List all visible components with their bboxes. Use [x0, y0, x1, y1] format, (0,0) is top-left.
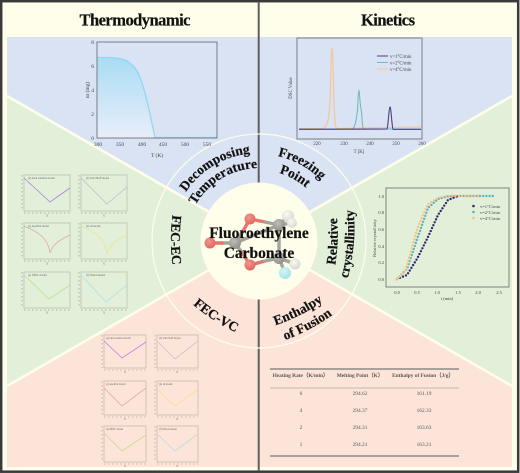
center circle	[200, 182, 318, 300]
plot: Apelblat model VC: (c) Apelblat model	[106, 383, 126, 386]
plot: lambda-h model VC: (d) λh model	[159, 383, 173, 386]
title: Fluoroethylene Carbonate	[209, 225, 309, 262]
plot: lambda-h model: X	[103, 262, 105, 266]
chart: decomposing temperature mass curve: 400	[138, 142, 146, 148]
heading: Kinetics: Kinetics	[361, 10, 416, 30]
plot: NRTL model VC: X	[124, 465, 126, 468]
label: Relative crystallinity: crystallinity	[342, 210, 358, 278]
table: enthalpy of fusion data: 6	[300, 391, 303, 397]
label: Enthalpy of Fusion: of Fusion	[284, 310, 332, 340]
plot: ideal solution model: X	[46, 214, 48, 218]
chart: relative crystallinity curves: 2.0	[475, 290, 482, 295]
label: Freezing Point: Freezing	[278, 147, 326, 182]
chart: relative crystallinity curves: 0.8	[378, 210, 385, 215]
plot: Apelblat model VC	[102, 381, 146, 421]
plot: NRTL model VC: (e) NRTL model	[106, 428, 123, 431]
table: enthalpy of fusion data: 1	[300, 442, 303, 448]
plot: NRTL model: X	[46, 312, 48, 314]
plot: ideal solution model VC	[102, 335, 146, 374]
table: enthalpy of fusion data: 163.21	[417, 442, 432, 448]
chart: relative crystallinity curves: 0.6	[378, 227, 385, 232]
plot: Wilson model VC	[155, 426, 198, 468]
plot: Apelblat model: X	[46, 262, 48, 266]
chart: relative crystallinity curves: 0.2	[378, 260, 384, 265]
plot: Wilson model VC: X	[176, 465, 178, 468]
chart: relative crystallinity curves: t (min)	[441, 296, 454, 301]
table: enthalpy of fusion data: 161.19	[417, 391, 432, 397]
table: enthalpy of fusion data: 294.21	[353, 442, 368, 448]
table: enthalpy of fusion data: Enthalpy of Fusion（J/g）	[392, 371, 454, 379]
label: FEC-VC: FEC-VC	[193, 298, 239, 332]
label: Decomposing Temperature: Temperature	[188, 162, 257, 204]
chart: DSC freezing point peaks: 240	[366, 142, 374, 147]
chart: relative crystallinity curves: 0.4	[378, 244, 385, 249]
label: Relative crystallinity	[326, 210, 358, 278]
plot: Wilson model: (f) Wilson model	[86, 274, 105, 277]
chart: relative crystallinity curves	[372, 188, 509, 301]
chart: relative crystallinity curves: 1.0	[434, 290, 441, 295]
chart: relative crystallinity curves: Relative crystallinity	[372, 218, 377, 257]
panel: green right sector	[259, 96, 512, 386]
heading: Thermodynamic: Thermodynamic	[80, 10, 190, 30]
chart: relative crystallinity curves: 1.0	[378, 194, 385, 199]
chart: relative crystallinity curves: v=2°C/min	[480, 210, 501, 215]
chart: decomposing temperature mass curve: 500	[181, 142, 189, 148]
chart: decomposing temperature mass curve	[84, 40, 217, 159]
chart: decomposing temperature mass curve: 350	[116, 142, 124, 148]
chart: decomposing temperature mass curve: 6	[91, 64, 94, 70]
label: Enthalpy of Fusion	[272, 296, 332, 340]
table: enthalpy of fusion data	[270, 369, 459, 456]
plot: Apelblat model: (c) Apelblat model	[28, 225, 49, 228]
chart: decomposing temperature mass curve: 0	[91, 136, 94, 142]
label: Freezing Point: Point	[279, 164, 310, 188]
charts: FEC-EC six model plots	[22, 175, 127, 314]
plot: lambda-h model VC	[155, 381, 198, 421]
charts: FEC-VC six model plots	[102, 335, 198, 468]
chart: DSC freezing point peaks	[289, 38, 426, 155]
table: enthalpy of fusion data: 294.31	[353, 425, 368, 431]
label: Enthalpy of Fusion: Enthalpy	[272, 296, 322, 326]
plot: Wilson model: X	[103, 312, 105, 314]
plot: ideal solution model VC: (a) ideal solution model	[106, 337, 131, 340]
plot: lambda-h model VC: X	[176, 418, 178, 421]
plot: lambda-h model: (d) λh model	[86, 225, 101, 228]
chart: decomposing temperature mass curve: T (K)	[151, 152, 163, 159]
chart: decomposing temperature mass curve: 2	[91, 112, 94, 118]
plot: NRTL model VC	[102, 426, 146, 468]
plot: Wilson model VC: (f) Wilson model	[159, 428, 177, 431]
chart: relative crystallinity curves: 0.0	[378, 277, 385, 282]
plot: Van't Hoff model VC: (b) Van't Hoff model	[159, 337, 181, 340]
chart: relative crystallinity curves: v=1°C/min	[480, 204, 501, 209]
table: enthalpy of fusion data: 4	[300, 408, 303, 414]
icon: FEC molecule	[204, 210, 300, 279]
plot: Van't Hoff model VC	[155, 335, 198, 374]
chart: DSC freezing point peaks: 260	[418, 142, 426, 147]
chart: DSC freezing point peaks: v=4°C/min	[390, 68, 412, 73]
chart: decomposing temperature mass curve: 300	[94, 142, 102, 148]
label: FEC-EC: FEC-EC	[170, 215, 182, 264]
plot: NRTL model: (e) NRTL model	[28, 274, 47, 277]
chart: relative crystallinity curves: 1.5	[455, 290, 462, 295]
table: enthalpy of fusion data: 294.62	[353, 391, 368, 397]
plot: Van't Hoff model	[79, 175, 127, 218]
table: enthalpy of fusion data: 2	[300, 425, 303, 431]
plot: ideal solution model VC: X	[124, 371, 126, 374]
plot: Apelblat model VC: X	[124, 418, 126, 421]
chart: DSC freezing point peaks: 230	[340, 142, 348, 147]
chart: decomposing temperature mass curve: 4	[91, 88, 94, 94]
plot: Van't Hoff model VC: X	[176, 371, 178, 374]
chart: decomposing temperature mass curve: 450	[159, 142, 167, 148]
panel: pink bottom sector	[7, 241, 512, 467]
chart: relative crystallinity curves: v=4°C/min	[480, 216, 501, 221]
panel: blue top sector	[7, 37, 512, 241]
plot: Van't Hoff model: (b) Van't Hoff model	[86, 177, 109, 180]
plot: Apelblat model	[22, 223, 70, 266]
label: Relative crystallinity: Relative	[326, 218, 338, 265]
chart: DSC freezing point peaks: DSC Value	[289, 77, 294, 99]
title: Fluoroethylene Carbonate: Carbonate	[224, 245, 294, 262]
chart: decomposing temperature mass curve: 550	[203, 142, 211, 148]
table: enthalpy of fusion data: Melting Point（K）	[337, 371, 383, 379]
chart: DSC freezing point peaks: v=2°C/min	[390, 62, 412, 66]
chart: relative crystallinity curves: 2.5	[496, 290, 503, 295]
table: enthalpy of fusion data: 162.33	[417, 408, 432, 414]
panel: green left sector	[7, 96, 259, 386]
chart: DSC freezing point peaks: T [K]	[354, 150, 365, 155]
chart: DSC freezing point peaks: 250	[392, 142, 400, 147]
chart: relative crystallinity curves: 0.5	[414, 290, 421, 295]
plot: ideal solution model	[22, 175, 70, 218]
plot: Van't Hoff model: X	[103, 214, 105, 218]
plot: NRTL model	[22, 272, 70, 314]
table: enthalpy of fusion data: Heating Rate（K/min）	[273, 371, 328, 379]
table: enthalpy of fusion data: 294.37	[353, 408, 368, 414]
chart: decomposing temperature mass curve: m (mg)	[84, 82, 91, 98]
plot: lambda-h model	[79, 223, 127, 266]
chart: DSC freezing point peaks: 220	[313, 142, 321, 147]
label: Decomposing Temperature: Decomposing	[178, 146, 250, 192]
chart: DSC freezing point peaks: v=1°C/min	[390, 55, 412, 60]
chart: decomposing temperature mass curve: 8	[91, 40, 94, 46]
chart: relative crystallinity curves: 0.0	[394, 290, 401, 295]
table: enthalpy of fusion data: 163.63	[417, 425, 432, 431]
title: Fluoroethylene Carbonate: Fluoroethylene	[209, 225, 309, 242]
plot: Wilson model	[79, 272, 127, 314]
plot: ideal solution model: (a) ideal solution model	[28, 177, 55, 180]
